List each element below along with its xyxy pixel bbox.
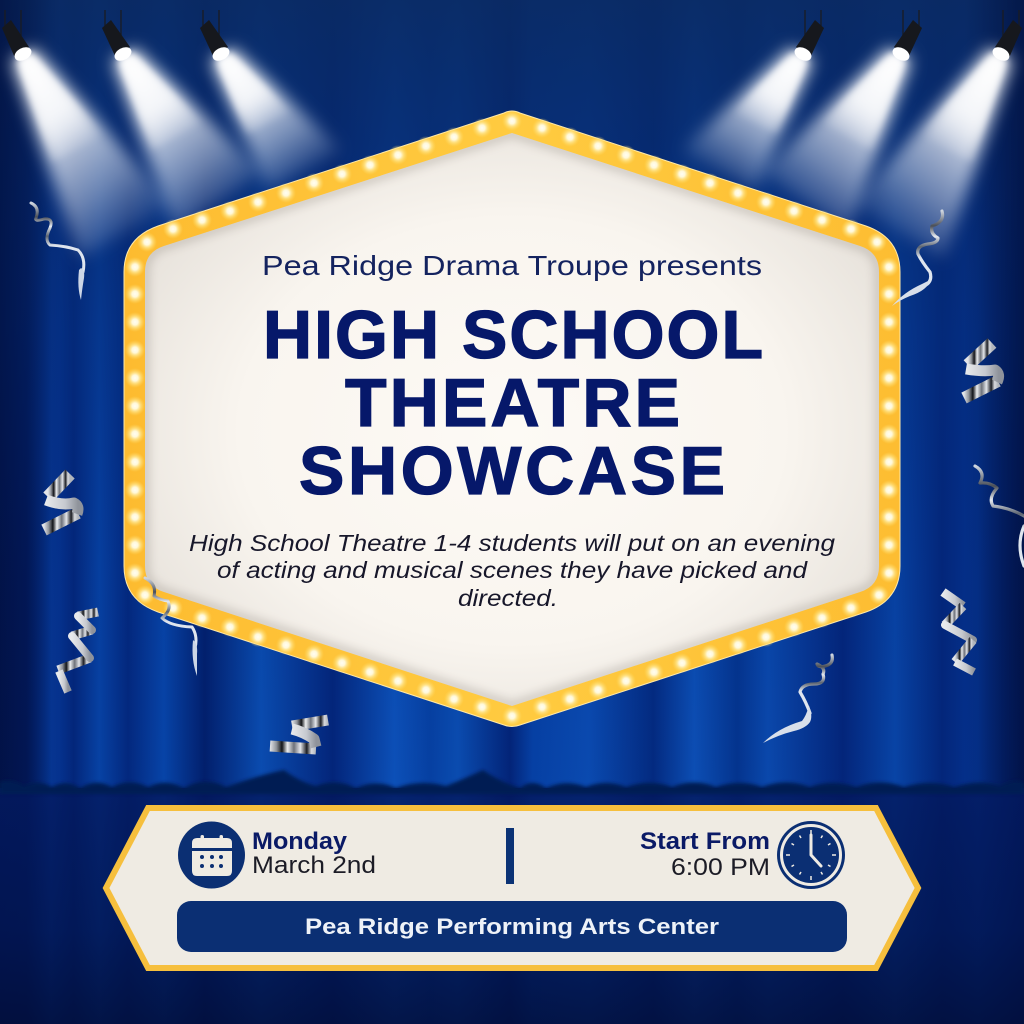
left spotlights bbox=[2, 10, 342, 258]
info panel frame bbox=[106, 808, 918, 968]
info panel bbox=[106, 808, 918, 968]
venue pill bbox=[177, 901, 847, 952]
icon: calendar bbox=[178, 822, 245, 888]
thin ribbon top left bbox=[31, 203, 84, 300]
light beam 4 bbox=[852, 48, 1012, 258]
lamp 5 bbox=[890, 10, 922, 64]
time text: Start From bbox=[640, 828, 770, 855]
description: High School Theatre 1-4 students will put on an evening bbox=[189, 530, 835, 556]
marquee bulbs bbox=[125, 111, 899, 726]
marquee sign bbox=[124, 111, 900, 726]
title: SHOWCASE bbox=[299, 433, 725, 509]
description: of acting and musical scenes they have picked and bbox=[217, 557, 808, 583]
light beam 3 bbox=[211, 48, 342, 190]
right spotlights bbox=[682, 10, 1022, 258]
date text: March 2nd bbox=[252, 852, 376, 879]
thin ribbon top right bbox=[892, 211, 943, 306]
light beam 6 bbox=[682, 48, 813, 190]
silver ribbon bottom bbox=[270, 720, 328, 749]
silver ribbon lower right bbox=[943, 592, 974, 672]
thin ribbon right edge bbox=[975, 466, 1024, 566]
silver ribbon right bbox=[964, 343, 999, 398]
lamp 1 bbox=[2, 10, 34, 64]
date text: Monday bbox=[252, 828, 348, 855]
stage floor bbox=[0, 770, 1024, 1024]
description bbox=[189, 530, 835, 611]
silver ribbon lower left bbox=[58, 612, 98, 692]
lamp 2 bbox=[102, 10, 134, 64]
light beam 5 bbox=[762, 48, 911, 232]
date text bbox=[252, 828, 376, 879]
marquee gold frame bbox=[124, 111, 900, 726]
marquee cream panel bbox=[145, 133, 879, 706]
title: HIGH SCHOOL bbox=[263, 297, 763, 373]
silver ribbon left bbox=[44, 474, 78, 530]
confetti ribbons bbox=[31, 203, 1024, 743]
lamp 6 bbox=[792, 10, 824, 64]
icon: clock bbox=[777, 821, 845, 889]
silver curl ribbons bbox=[44, 343, 999, 749]
light beam 1 bbox=[12, 48, 172, 258]
lamp 4 bbox=[990, 10, 1022, 64]
presenter line: Pea Ridge Drama Troupe presents bbox=[262, 250, 762, 281]
light beam 2 bbox=[113, 48, 262, 232]
time text bbox=[640, 828, 770, 881]
thin ribbon lower right bbox=[763, 655, 832, 743]
title bbox=[263, 297, 763, 509]
description: directed. bbox=[458, 585, 558, 611]
time text: 6:00 PM bbox=[671, 854, 770, 881]
lamp 3 bbox=[200, 10, 232, 64]
title: THEATRE bbox=[345, 365, 680, 441]
thin ribbon on sign corner bbox=[145, 578, 197, 676]
divider bbox=[506, 828, 514, 884]
venue pill: Pea Ridge Performing Arts Center bbox=[305, 914, 719, 939]
